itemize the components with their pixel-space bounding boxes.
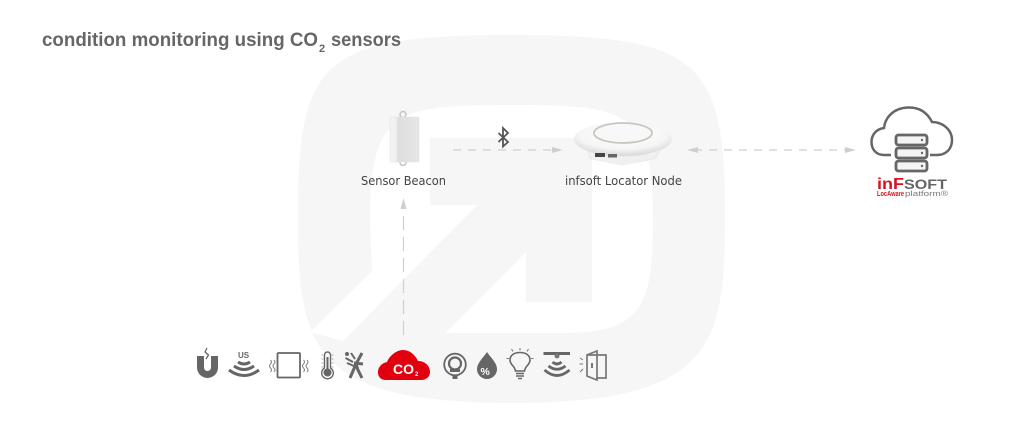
icon: light sensor bulb	[506, 348, 534, 378]
icon: humidity drop: %	[480, 366, 490, 378]
icon: bluetooth	[498, 128, 508, 146]
logo: infsoft LocAware platform	[877, 176, 949, 198]
icon: presence sensor	[544, 352, 570, 376]
icon: humidity drop	[477, 352, 497, 379]
title: condition monitoring using CO	[42, 30, 318, 51]
background watermark logo	[298, 35, 725, 403]
logo: infsoft LocAware platform: LocAware	[877, 191, 904, 198]
icon: vibration sensor	[270, 353, 308, 378]
icon: thermometer	[322, 352, 334, 379]
title: sensors	[331, 30, 401, 51]
icon: door contact sensor	[580, 351, 606, 380]
icon: cloud with server stack	[872, 107, 952, 171]
icon: magnetic sensor	[200, 348, 214, 375]
logo: infsoft LocAware platform: inF	[877, 176, 904, 193]
title	[42, 30, 401, 55]
icon: ultrasonic sensor	[229, 351, 259, 376]
logo: infsoft LocAware platform: SOFT	[904, 176, 948, 192]
arrow: beacon to locator node	[453, 147, 563, 153]
logo: infsoft LocAware platform: platform®	[905, 190, 949, 198]
icon: ultrasonic sensor: US	[238, 351, 250, 360]
icon: CO2 cloud (highlighted): 2	[415, 372, 419, 378]
icon: CO2 cloud (highlighted)	[378, 350, 430, 380]
icon: CO2 cloud (highlighted): CO	[393, 361, 414, 377]
title: 2	[319, 43, 325, 55]
arrow: locator node to cloud platform	[687, 147, 856, 153]
arrow: CO2 sensor to beacon	[400, 198, 406, 335]
icon: infsoft locator node	[574, 122, 672, 166]
icon: sensor beacon device	[390, 112, 419, 166]
icon: pressure gauge	[444, 354, 466, 379]
label: sensor beacon: Sensor Beacon	[361, 173, 446, 188]
label: infsoft locator node: infsoft Locator Node	[565, 173, 682, 188]
icon: motion sensor	[345, 352, 363, 378]
